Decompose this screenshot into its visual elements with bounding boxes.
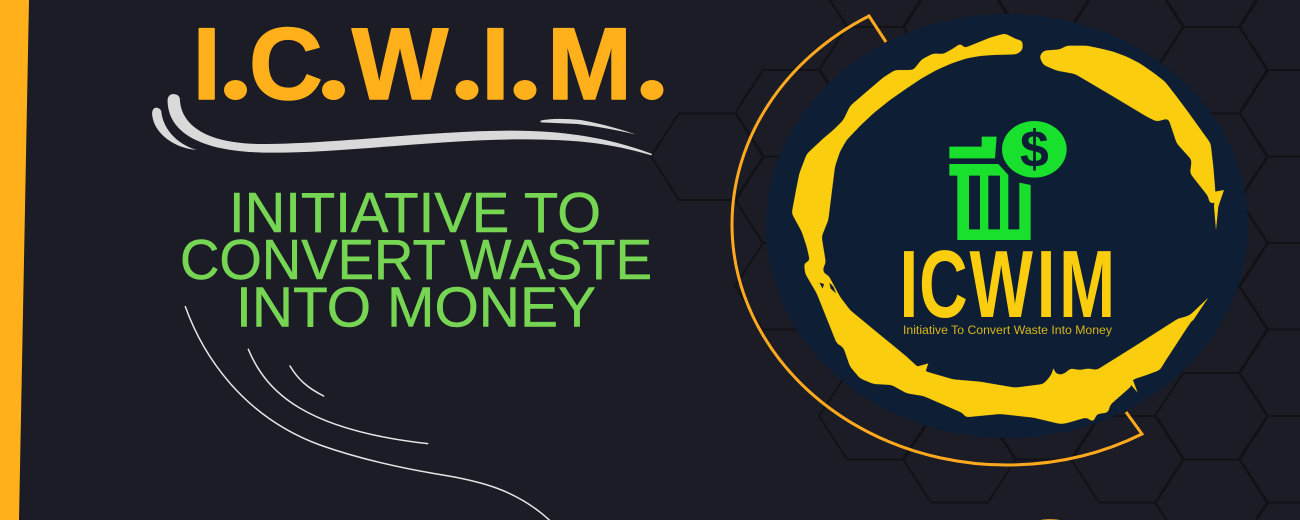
yellow brush ring [792,33,1224,424]
title: M [547,7,632,121]
title round dots [224,80,664,100]
logo wordmark: ICWIM [899,230,1115,338]
orange left bar [0,0,29,520]
title: . [457,32,477,110]
thin white curved lines [185,307,549,520]
logo tagline: Initiative To Convert Waste Into Money [903,325,1112,337]
title: I [481,7,510,121]
white brush swoosh under title [152,94,652,155]
title: . [642,32,662,110]
bottom orange mark [1037,519,1063,520]
title: C [249,7,323,121]
subtitle: CONVERT WASTE [180,228,652,292]
logo circle [766,14,1248,438]
title: I [192,7,221,121]
title: . [324,32,343,110]
subtitle: INITIATIVE TO [229,181,601,245]
icon: trash bin [949,137,1031,240]
title: . [515,32,535,110]
subtitle [180,181,652,340]
title: W [352,7,449,121]
orange ring bracket [732,16,1142,465]
icon: dollar coin [1002,119,1067,178]
icon: dollar coin: $ [1020,119,1049,177]
subtitle: INTO MONEY [236,276,596,340]
logo graphics [792,33,1224,424]
title: . [226,32,245,110]
